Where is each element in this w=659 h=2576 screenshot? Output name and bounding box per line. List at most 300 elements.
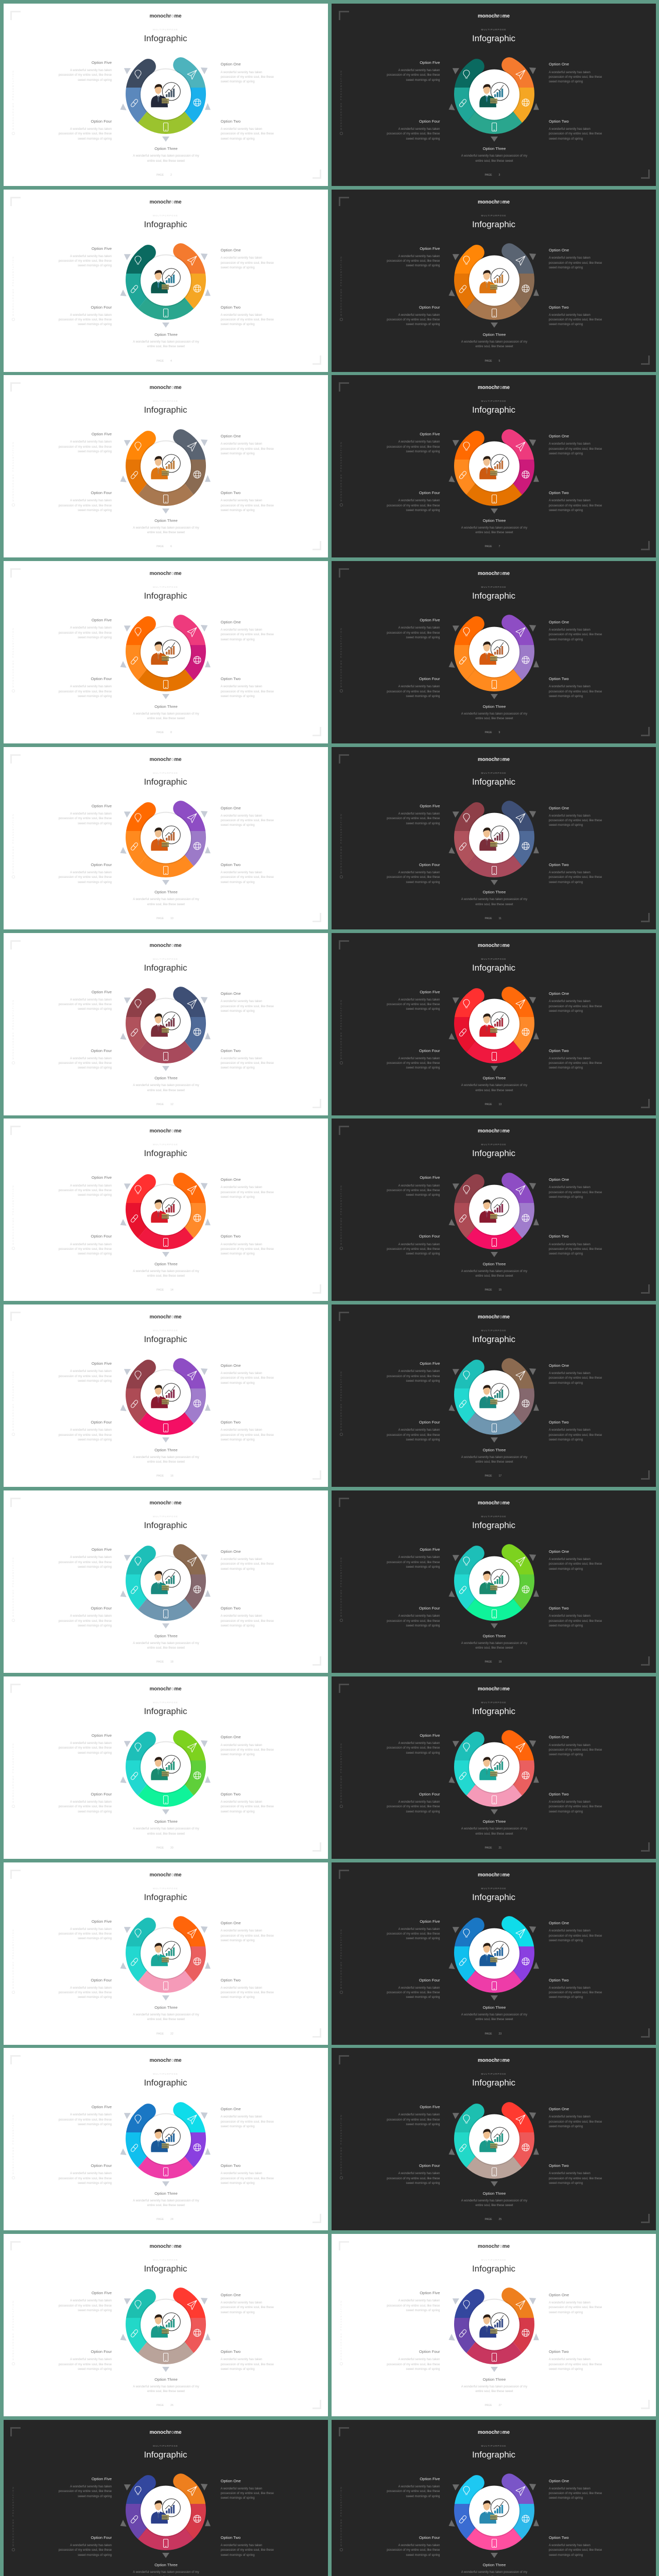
businessman (479, 2499, 509, 2523)
option two: A wonderful serenity has taken (549, 128, 591, 131)
arrows (120, 253, 211, 328)
option two: sweet mornings of spring (549, 1810, 583, 1814)
icons (130, 70, 201, 131)
option five: Option Five (420, 1919, 440, 1924)
logo: monochrome (478, 1314, 510, 1320)
option five: possession of my entire soul, like these (59, 1933, 112, 1936)
option four: sweet mornings of spring (406, 1996, 440, 1999)
option two: possession of my entire soul, like these (549, 2363, 602, 2366)
icons (130, 628, 201, 689)
option five (373, 2477, 440, 2499)
option two: Option Two (549, 676, 569, 681)
option four: A wonderful serenity has taken (398, 2544, 440, 2547)
option five: possession of my entire soul, like these (387, 1561, 440, 1564)
option three: A wonderful serenity has taken possession of my (461, 898, 527, 901)
option two: sweet mornings of spring (549, 1066, 583, 1070)
logo: monochrome (149, 757, 182, 762)
option five (387, 246, 440, 267)
option three: A wonderful serenity has taken possession of my (133, 1456, 199, 1459)
page number: 6 (170, 545, 172, 548)
option five: possession of my entire soul, like these (59, 74, 112, 77)
page number: PAGE (485, 360, 492, 363)
page number: PAGE (157, 2032, 164, 2035)
option four (45, 1048, 112, 1071)
option one: sweet mornings of spring (549, 266, 583, 269)
option two (220, 1048, 287, 1071)
option five: A wonderful serenity has taken (70, 255, 112, 258)
eyebrow: MULTIPURPOSE (153, 400, 178, 402)
option two: A wonderful serenity has taken (549, 1987, 591, 1990)
option two: A wonderful serenity has taken (220, 128, 262, 131)
option five: Option Five (92, 60, 112, 65)
donut chart (449, 57, 539, 142)
option two: possession of my entire soul, like these (220, 1991, 274, 1994)
page number (485, 1660, 506, 1664)
option four: possession of my entire soul, like these (59, 690, 112, 693)
option two: sweet mornings of spring (549, 323, 583, 326)
page number: 2 (170, 174, 172, 177)
option one: sweet mornings of spring (549, 2497, 583, 2500)
segments (126, 1544, 206, 1621)
option one: A wonderful serenity has taken (220, 2301, 262, 2304)
businessman (479, 268, 509, 293)
option four: Option Four (91, 2163, 112, 2168)
option two: sweet mornings of spring (220, 2368, 255, 2371)
page number: 13 (498, 1103, 501, 1106)
option two: A wonderful serenity has taken (549, 685, 591, 688)
option one: Option One (220, 62, 241, 66)
option one (220, 1177, 287, 1200)
panel: slide page 24 (3, 2048, 327, 2230)
option three: A wonderful serenity has taken possession of my (461, 527, 527, 530)
panel: slide page 7 (332, 375, 656, 557)
segments (126, 2102, 206, 2179)
option four: possession of my entire soul, like these (387, 132, 440, 135)
page number: 27 (498, 2404, 501, 2407)
option five: sweet mornings of spring (78, 2123, 112, 2126)
option one: Option One (549, 2293, 569, 2297)
option three: Option Three (483, 1448, 506, 1452)
option two: sweet mornings of spring (220, 323, 255, 326)
option one: A wonderful serenity has taken (549, 1000, 591, 1003)
option four: Option Four (419, 1234, 440, 1239)
segments (454, 801, 534, 877)
panel: slide page 12 (3, 933, 327, 1115)
heading: Infographic (144, 963, 187, 973)
segments (454, 1916, 534, 1993)
option two: sweet mornings of spring (220, 1996, 255, 1999)
option one: possession of my entire soul, like these (220, 1191, 274, 1194)
option four (373, 676, 440, 699)
option one: sweet mornings of spring (549, 638, 583, 641)
option one: sweet mornings of spring (549, 2311, 583, 2314)
option four: sweet mornings of spring (406, 2368, 440, 2371)
businessman (151, 1941, 180, 1966)
option three (114, 2377, 217, 2394)
eyebrow: MULTIPURPOSE (153, 1515, 178, 1518)
logo: monochrome (149, 2058, 182, 2063)
option one (220, 1363, 287, 1386)
option four (45, 1978, 112, 2001)
option two (220, 676, 287, 699)
businessman (151, 2127, 180, 2152)
option two (549, 1048, 616, 1071)
option one: Option One (220, 2107, 241, 2111)
logo: monochrome (478, 1128, 510, 1134)
arrows (448, 1368, 539, 1443)
heading: Infographic (144, 1520, 187, 1530)
option four: possession of my entire soul, like these (387, 1062, 440, 1065)
option four: Option Four (419, 490, 440, 495)
option five: Option Five (420, 2291, 440, 2295)
option two: A wonderful serenity has taken (220, 1801, 262, 1804)
option one: possession of my entire soul, like these (549, 1749, 602, 1752)
icons (130, 2486, 201, 2548)
option five: Option Five (420, 2477, 440, 2481)
option one: A wonderful serenity has taken (220, 2487, 262, 2490)
logo: monochrome (478, 571, 510, 577)
option five: A wonderful serenity has taken (398, 1928, 440, 1931)
heading: Infographic (144, 219, 187, 229)
donut chart (443, 786, 546, 889)
option four: Option Four (91, 1234, 112, 1239)
option two: Option Two (220, 1048, 240, 1053)
side text: MONOCHROME PRESENTATION (340, 1371, 342, 1431)
eyebrow: MULTIPURPOSE (153, 1329, 178, 1332)
page number: PAGE (157, 1289, 164, 1292)
option four (373, 2163, 440, 2187)
option two: A wonderful serenity has taken (220, 1987, 262, 1990)
option one (220, 248, 274, 269)
option five: A wonderful serenity has taken (70, 440, 112, 444)
panel: slide page 8 (3, 561, 327, 743)
option five: Option Five (92, 2291, 112, 2295)
panel: slide page 15 (332, 1118, 656, 1301)
option five (373, 1547, 440, 1570)
option one: sweet mornings of spring (220, 80, 255, 83)
option one (220, 1735, 287, 1758)
option five: sweet mornings of spring (406, 1380, 440, 1383)
option four (59, 490, 112, 512)
option one: possession of my entire soul, like these (220, 1749, 274, 1752)
option one: Option One (549, 2107, 569, 2111)
option three: Option Three (154, 2191, 178, 2196)
page number: PAGE (485, 1660, 492, 1664)
page number: 3 (498, 174, 500, 177)
option four: Option Four (419, 305, 440, 310)
segments (454, 2102, 534, 2179)
option one: sweet mornings of spring (549, 1939, 583, 1942)
option five: A wonderful serenity has taken (70, 2485, 112, 2488)
eyebrow: MULTIPURPOSE (153, 586, 178, 588)
page number (157, 917, 177, 921)
option four: possession of my entire soul, like these (387, 1434, 440, 1437)
arrows (448, 2112, 539, 2187)
donut chart (443, 2087, 546, 2190)
option three: A wonderful serenity has taken possession of my (133, 1827, 199, 1831)
option one: sweet mornings of spring (549, 824, 583, 827)
option one: possession of my entire soul, like these (220, 2306, 274, 2309)
option one: possession of my entire soul, like these (549, 1005, 602, 1008)
page number (157, 174, 172, 177)
option five: possession of my entire soul, like these (387, 1003, 440, 1006)
eyebrow: MULTIPURPOSE (481, 586, 507, 588)
option one: sweet mornings of spring (549, 1568, 583, 1571)
option one: sweet mornings of spring (549, 1753, 583, 1756)
option four: possession of my entire soul, like these (59, 1991, 112, 1994)
logo: monochrome (478, 2058, 510, 2063)
option five (59, 246, 112, 267)
panel: slide page 21 (332, 1676, 656, 1859)
option two: sweet mornings of spring (220, 1252, 255, 1256)
option five: sweet mornings of spring (406, 1194, 440, 1197)
icons (130, 1743, 201, 1804)
option two: sweet mornings of spring (220, 881, 255, 884)
donut chart (114, 1901, 217, 2004)
option five: sweet mornings of spring (78, 1194, 112, 1197)
panel: slide page 25 (332, 2048, 656, 2230)
businessman (151, 2313, 180, 2338)
option three: entire soul, like these sweet (147, 2018, 185, 2021)
option one: possession of my entire soul, like these (549, 2121, 602, 2124)
option five: Option Five (420, 990, 440, 994)
option three (114, 2005, 217, 2023)
option five: Option Five (420, 1175, 440, 1180)
eyebrow: MULTIPURPOSE (153, 2445, 178, 2447)
page number (157, 731, 177, 735)
eyebrow: MULTIPURPOSE (153, 2259, 178, 2261)
page number (157, 360, 172, 363)
option three (443, 2191, 546, 2209)
icons (130, 1185, 201, 1246)
option one: Option One (549, 248, 569, 252)
option three: entire soul, like these sweet (147, 531, 185, 534)
option four: Option Four (91, 119, 112, 124)
option one (549, 2293, 616, 2315)
option one: sweet mornings of spring (549, 80, 583, 83)
option five: sweet mornings of spring (406, 450, 440, 453)
eyebrow: MULTIPURPOSE (481, 958, 507, 960)
option two (549, 1234, 616, 1257)
option four (373, 2535, 440, 2558)
page number: PAGE (485, 545, 492, 548)
option one: possession of my entire soul, like these (549, 819, 602, 822)
businessman (151, 1383, 180, 1409)
option four: Option Four (419, 2163, 440, 2168)
page number: 21 (498, 1846, 501, 1850)
option five: sweet mornings of spring (78, 1008, 112, 1011)
side text: MONOCHROME PRESENTATION (340, 627, 342, 687)
option two (549, 1420, 616, 1443)
option two (220, 2163, 287, 2187)
option three: A wonderful serenity has taken possession of my (133, 2385, 199, 2388)
option five (373, 1733, 440, 1756)
heading: Infographic (472, 2264, 515, 2274)
page number (485, 360, 500, 363)
option five (45, 1919, 112, 1942)
option two: sweet mornings of spring (220, 695, 255, 698)
heading: Infographic (144, 2078, 187, 2088)
option two: possession of my entire soul, like these (220, 1805, 274, 1808)
option one (549, 1363, 616, 1386)
option two: possession of my entire soul, like these (220, 2549, 274, 2552)
option five: Option Five (420, 246, 440, 251)
option four: sweet mornings of spring (406, 138, 440, 141)
logo: monochrome (478, 1872, 510, 1877)
option one: possession of my entire soul, like these (220, 1005, 274, 1008)
option four: possession of my entire soul, like these (59, 1434, 112, 1437)
option four: possession of my entire soul, like these (59, 1805, 112, 1808)
option five (59, 432, 112, 453)
option three: A wonderful serenity has taken possession of my (461, 1456, 527, 1459)
segments (126, 57, 206, 134)
donut chart (443, 600, 546, 703)
option five: A wonderful serenity has taken (70, 1556, 112, 1559)
option three (443, 1819, 546, 1837)
panel: slide page 22 (3, 1862, 327, 2044)
option five: possession of my entire soul, like these (387, 632, 440, 635)
option five: Option Five (92, 618, 112, 622)
eyebrow: MULTIPURPOSE (153, 1887, 178, 1890)
option one: Option One (220, 620, 241, 624)
option four: sweet mornings of spring (78, 2554, 112, 2557)
option five: possession of my entire soul, like these (59, 446, 112, 449)
option two: sweet mornings of spring (549, 2368, 583, 2371)
option five: possession of my entire soul, like these (59, 632, 112, 635)
arrows (120, 2484, 211, 2558)
option two: A wonderful serenity has taken (549, 1615, 591, 1618)
option one (220, 2479, 287, 2501)
option one (220, 2107, 287, 2129)
option five: A wonderful serenity has taken (398, 1742, 440, 1745)
option five: sweet mornings of spring (406, 79, 440, 82)
option two: sweet mornings of spring (549, 1996, 583, 1999)
icons (130, 999, 201, 1060)
option four: sweet mornings of spring (406, 1438, 440, 1442)
option five: Option Five (420, 2105, 440, 2109)
option four: sweet mornings of spring (78, 695, 112, 698)
page number: PAGE (485, 2404, 492, 2407)
heading: Infographic (472, 1892, 515, 1902)
segments (454, 57, 534, 134)
option four: Option Four (419, 1792, 440, 1797)
option one: Option One (549, 62, 569, 66)
option four (45, 2349, 112, 2372)
option five: Option Five (92, 1919, 112, 1924)
option four: A wonderful serenity has taken (398, 1615, 440, 1618)
option four (387, 305, 440, 326)
panel: slide page 23 (332, 1862, 656, 2044)
option three (133, 518, 199, 534)
option three: A wonderful serenity has taken possession of my (461, 2199, 527, 2202)
option five: possession of my entire soul, like these (387, 2304, 440, 2308)
logo: monochrome (478, 1500, 510, 1506)
segments (454, 243, 534, 320)
heading: Infographic (472, 405, 515, 415)
option four: sweet mornings of spring (406, 2554, 440, 2557)
option five: possession of my entire soul, like these (59, 1003, 112, 1006)
option five: possession of my entire soul, like these (387, 817, 440, 820)
option one: A wonderful serenity has taken (549, 1372, 591, 1375)
option two (220, 119, 274, 141)
icons (459, 2486, 529, 2548)
option four: Option Four (91, 1420, 112, 1425)
side text: MONOCHROME PRESENTATION (11, 999, 14, 1059)
option four: sweet mornings of spring (78, 881, 112, 884)
option three: A wonderful serenity has taken possession of my (461, 1827, 527, 1831)
option one: A wonderful serenity has taken (220, 815, 262, 818)
option five: possession of my entire soul, like these (387, 1189, 440, 1192)
option five (373, 2105, 440, 2128)
option two (549, 1792, 616, 1815)
icons (459, 1557, 529, 1618)
option five: Option Five (420, 1547, 440, 1552)
segments (454, 1173, 534, 1249)
option one: possession of my entire soul, like these (220, 1563, 274, 1566)
option five: sweet mornings of spring (78, 2495, 112, 2498)
page number: PAGE (485, 2032, 492, 2035)
option one: A wonderful serenity has taken (220, 1929, 262, 1933)
heading: Infographic (472, 963, 515, 973)
side text: MONOCHROME PRESENTATION (11, 1185, 14, 1245)
option one: possession of my entire soul, like these (549, 1377, 602, 1380)
businessman (479, 454, 509, 479)
option two: possession of my entire soul, like these (549, 318, 602, 321)
panel: slide page 17 (332, 1304, 656, 1487)
eyebrow: MULTIPURPOSE (481, 1701, 507, 1704)
option four: possession of my entire soul, like these (59, 1620, 112, 1623)
option one (220, 1921, 287, 1943)
logo: monochrome (149, 2430, 182, 2435)
option four (373, 1048, 440, 1071)
option two: possession of my entire soul, like these (549, 1805, 602, 1808)
option one: Option One (220, 1921, 241, 1925)
icons (459, 1929, 529, 1990)
option five: A wonderful serenity has taken (398, 1370, 440, 1373)
option three: A wonderful serenity has taken possession of my (461, 1642, 527, 1645)
option three: Option Three (154, 146, 178, 151)
option one: A wonderful serenity has taken (549, 1558, 591, 1561)
option three: entire soul, like these sweet (476, 531, 513, 534)
option four: A wonderful serenity has taken (70, 499, 112, 502)
page number: 23 (498, 2032, 501, 2035)
option three (443, 1262, 546, 1279)
option one: sweet mornings of spring (220, 1753, 255, 1756)
logo: monochrome (478, 13, 510, 19)
option one: possession of my entire soul, like these (549, 262, 602, 265)
option four (45, 862, 112, 885)
heading: Infographic (472, 1148, 515, 1158)
icons (130, 2300, 201, 2362)
arrows (448, 997, 539, 1071)
option four: A wonderful serenity has taken (398, 2358, 440, 2361)
option four (373, 2349, 440, 2372)
option four: Option Four (91, 676, 112, 681)
icons (130, 442, 201, 503)
eyebrow: MULTIPURPOSE (481, 1143, 507, 1146)
option four: sweet mornings of spring (78, 1252, 112, 1256)
option three: A wonderful serenity has taken possession of my (133, 2013, 199, 2016)
option five (45, 618, 112, 640)
icons (130, 814, 201, 875)
page number: PAGE (157, 731, 164, 734)
option one: A wonderful serenity has taken (549, 1929, 591, 1933)
option three: Option Three (154, 2005, 178, 2010)
option three: Option Three (154, 332, 178, 337)
option one: possession of my entire soul, like these (549, 76, 602, 79)
option two: A wonderful serenity has taken (220, 1243, 262, 1246)
option four: possession of my entire soul, like these (59, 2177, 112, 2180)
